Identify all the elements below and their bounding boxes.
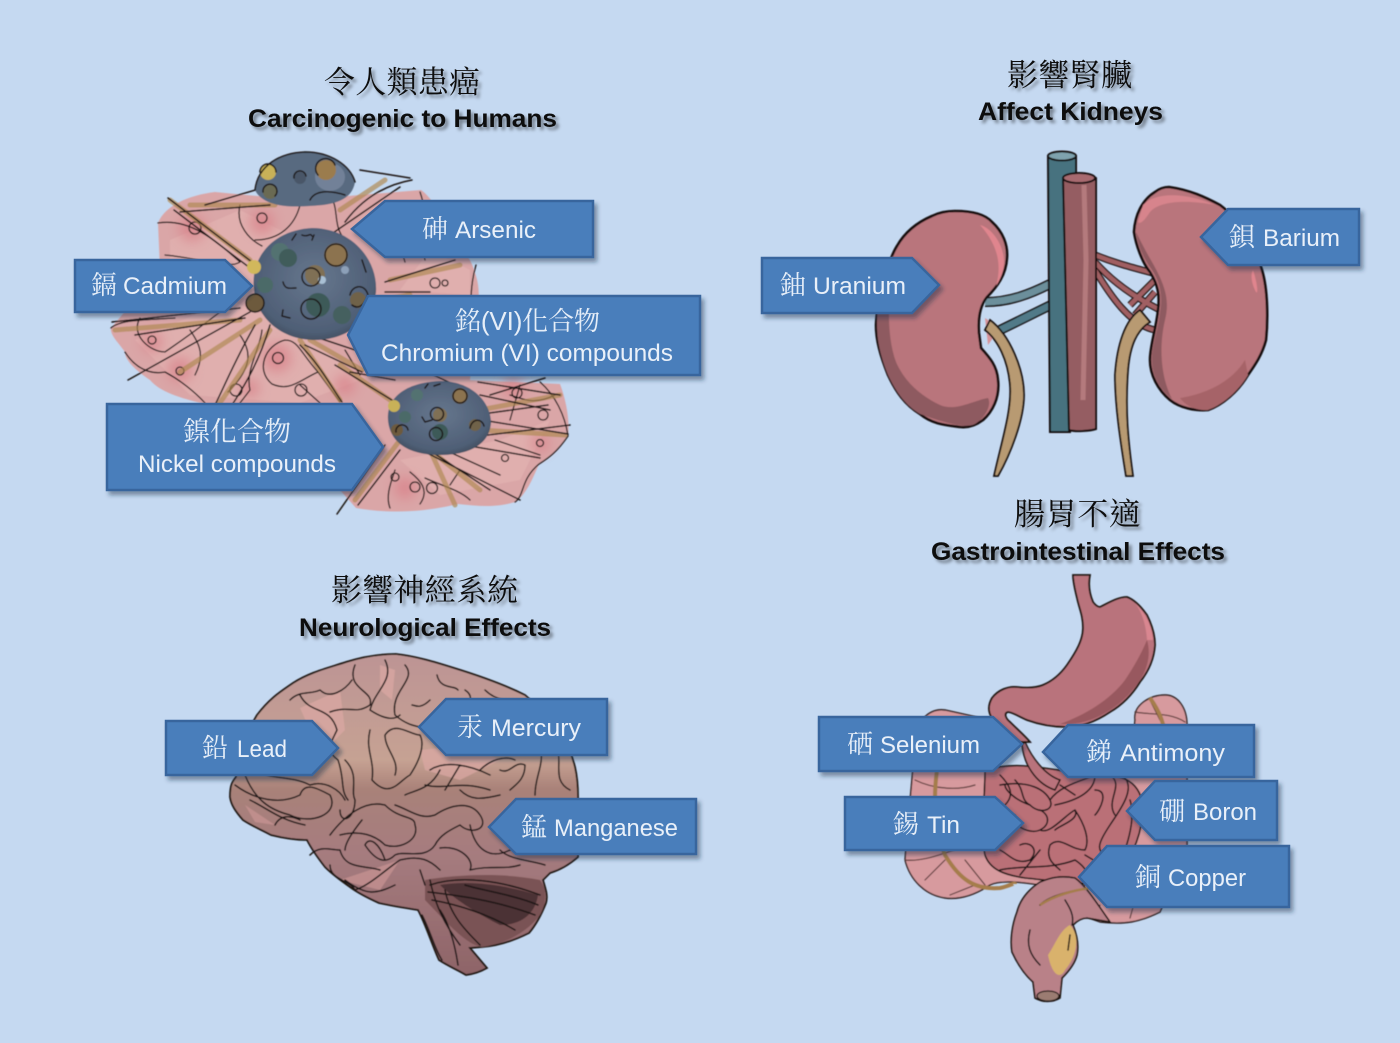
callout: boron: [1127, 781, 1277, 840]
callout: copper: Copper: [1168, 865, 1246, 892]
ureter left: [985, 320, 1024, 476]
callout: uranium: Uranium: [813, 273, 906, 300]
stomach: [989, 575, 1155, 742]
callout: mercury: 汞: [457, 707, 483, 744]
heading: carcinogenic: [248, 65, 557, 133]
callout: boron: Boron: [1193, 799, 1257, 826]
panel: gastrointestinal effects: [819, 497, 1289, 1001]
callout: chromium: Chromium (VI) compounds: [381, 340, 673, 367]
tumor: top: [255, 152, 355, 207]
callout: chromium: 銘(VI)化合物: [455, 301, 600, 338]
callout: uranium: 鈾: [780, 265, 806, 302]
callout: uranium: [762, 258, 939, 313]
heading: gastrointestinal: Gastrointestinal Effects: [931, 538, 1225, 566]
callout: cadmium: Cadmium: [123, 273, 227, 300]
callout: selenium: Selenium: [880, 732, 980, 759]
spicules: [115, 180, 565, 505]
callout: manganese: 錳: [521, 807, 547, 844]
callout: arsenic: Arsenic: [455, 217, 536, 244]
callout: tin: Tin: [927, 812, 960, 839]
callout: nickel: Nickel compounds: [138, 451, 336, 478]
callout: selenium: 硒: [847, 724, 873, 761]
callout: arsenic: [352, 201, 593, 257]
callout: lead: 鉛: [202, 728, 228, 765]
heading: neurological: [299, 573, 551, 642]
heading: neurological: 影響神經系統: [331, 573, 519, 608]
panel: carcinogenic to humans: [75, 65, 700, 514]
callout: lead: Lead: [237, 736, 287, 763]
red cell nuclei: [142, 210, 549, 499]
heading: kidneys: Affect Kidneys: [978, 98, 1163, 126]
aorta: [1063, 174, 1096, 431]
callout: tin: 錫: [893, 804, 919, 841]
callout: barium: Barium: [1263, 225, 1340, 252]
callout: nickel: [107, 404, 383, 490]
panel: affect kidneys: [762, 58, 1359, 476]
callout: barium: 鋇: [1229, 217, 1256, 254]
large intestine: [905, 695, 1187, 923]
heading: kidneys: 影響腎臟: [1007, 58, 1132, 93]
left kidney: [876, 211, 1007, 427]
heading: gastrointestinal: [931, 497, 1225, 566]
illustration: tumor cells: [111, 152, 570, 514]
small intestine: [983, 766, 1143, 883]
colon band: [935, 698, 1165, 888]
renal veins: [985, 255, 1160, 330]
callout: cadmium: 鎘: [91, 265, 117, 302]
right kidney: [1134, 187, 1267, 410]
callout: boron: 硼: [1159, 791, 1185, 828]
callout: nickel: 鎳化合物: [183, 410, 291, 449]
heading: neurological: Neurological Effects: [299, 614, 551, 642]
callout: cadmium: [75, 260, 252, 312]
callout: manganese: [489, 799, 696, 854]
callout: copper: [1079, 846, 1289, 907]
callout: antimony: [1043, 725, 1254, 777]
appendix and rectum: [1011, 877, 1110, 1001]
heading: gastrointestinal: 腸胃不適: [1014, 497, 1140, 532]
callout: mercury: [419, 699, 607, 755]
ureter right: [1115, 310, 1150, 476]
callout: barium: [1201, 209, 1359, 265]
panel: neurological effects: [166, 573, 696, 975]
vena cava: [1048, 153, 1076, 432]
callout: chromium: [348, 296, 700, 375]
callout: tin: [845, 797, 1023, 850]
illustration: kidneys: [876, 152, 1267, 476]
callout: copper: 銅: [1135, 857, 1161, 894]
callout: mercury: Mercury: [491, 715, 581, 742]
callout: antimony: 銻: [1086, 732, 1112, 769]
illustration: brain: [230, 654, 578, 975]
tumor: main: [246, 228, 376, 340]
callout: lead: [166, 721, 338, 775]
heading: carcinogenic: 令人類患癌: [324, 65, 480, 100]
illustration: digestive system: [905, 575, 1187, 1001]
callout: antimony: Antimony: [1120, 740, 1225, 767]
callout: selenium: [819, 717, 1022, 771]
callout: arsenic: 砷: [422, 209, 448, 246]
tumor: bottom: [388, 381, 491, 455]
heading: kidneys: [978, 58, 1163, 126]
callout: manganese: Manganese: [554, 815, 678, 842]
heading: carcinogenic: Carcinogenic to Humans: [248, 105, 557, 133]
